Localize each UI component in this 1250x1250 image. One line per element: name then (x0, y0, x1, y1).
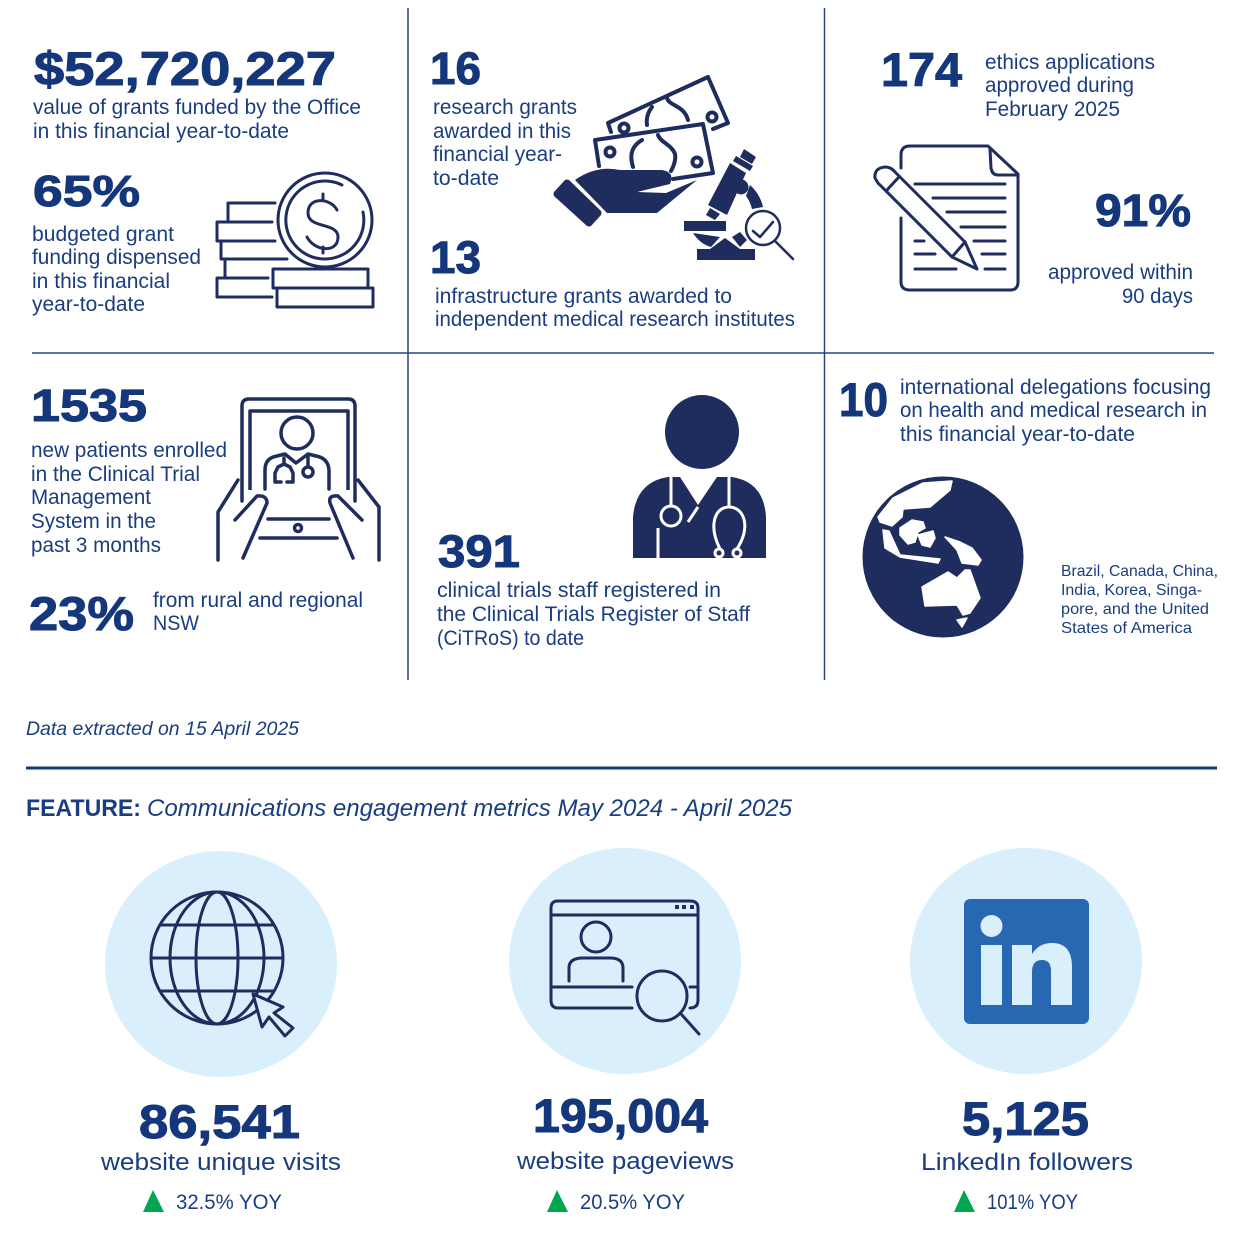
icon: coins (217, 173, 373, 307)
icon: microscope with magnifier (684, 149, 793, 260)
metric: 86,541 (100, 1095, 341, 1176)
icon: document and pencil (875, 146, 1018, 290)
stat: patients enrolled: Management (31, 486, 151, 509)
stat: clinical trials staff (437, 526, 750, 650)
change: 20.5% YOY: 20.5% YOY (580, 1191, 685, 1214)
stat: research grants: to-date (433, 167, 499, 190)
change: 101% YOY (954, 1190, 1078, 1214)
panel: clinical trial patients (29, 380, 379, 640)
stat: international delegations (839, 373, 1211, 446)
stat: rural and regional: 23% (29, 587, 134, 640)
stat: patients enrolled: past 3 months (31, 534, 161, 557)
stat: approved within 90 days: 90 days (1122, 285, 1193, 308)
icon: browser with magnifier (509, 848, 741, 1074)
feature heading: FEATURE: (26, 795, 141, 822)
stat: budget dispensed (32, 167, 201, 316)
stat: ethics applications: ethics applications (985, 51, 1155, 74)
stat: research grants (430, 43, 577, 190)
panel: international delegations (839, 373, 1218, 638)
stat: ethics applications (881, 43, 1155, 121)
panel: website pageviews (509, 848, 741, 1214)
feature heading: Communications engagement metrics May 2024 - April 2025 (147, 795, 793, 822)
stat: international delegations: international delegations focusing (900, 376, 1211, 399)
stat: clinical trials staff: clinical trials staff registered in (437, 579, 721, 602)
stat: clinical trials staff: the Clinical Trials Register of Staff (437, 603, 750, 626)
stat: budget dispensed: funding dispensed (32, 246, 201, 269)
metric: 195,004: 195,004 (533, 1089, 708, 1142)
panel: research grants (430, 43, 795, 331)
icon: globe showing Australia (862, 476, 1024, 638)
stat: rural and regional (29, 587, 363, 640)
stat: grant value (33, 42, 361, 143)
metric: 5,125: 5,125 (962, 1092, 1089, 1145)
stat: grant value: $52,720,227 (34, 42, 336, 95)
list of countries: States of America (1061, 620, 1192, 637)
stat: patients enrolled: in the Clinical Trial (31, 463, 200, 486)
list of countries: India, Korea, Singa- (1061, 582, 1202, 599)
icon: hands holding tablet with doctor (218, 399, 379, 560)
stat: ethics applications: 174 (881, 43, 962, 96)
panel: clinical trials staff (437, 395, 766, 650)
stat: patients enrolled: 1535 (31, 380, 147, 431)
stat: approved within 90 days: approved within (1048, 261, 1193, 284)
icon: doctor with stethoscope (633, 395, 766, 558)
panel: grant funding (32, 42, 373, 316)
stat: infrastructure grants: independent medical research institutes (435, 308, 795, 331)
stat: patients enrolled (31, 380, 227, 557)
metric: 195,004 (516, 1089, 734, 1175)
panel: ethics applications (875, 43, 1193, 308)
stat: budget dispensed: in this financial (32, 270, 170, 293)
metric: 5,125: LinkedIn followers (921, 1149, 1133, 1176)
icon: globe with cursor (105, 851, 337, 1077)
stat: patients enrolled: System in the (31, 510, 156, 533)
stat: rural and regional: NSW (153, 612, 199, 635)
stat: grant value: in this financial year-to-date (33, 120, 289, 143)
change: 32.5% YOY: 32.5% YOY (176, 1191, 282, 1214)
panel: website unique visits (100, 851, 341, 1214)
icon: hand holding money (554, 77, 728, 226)
stat: infrastructure grants (430, 232, 795, 331)
stat: clinical trials staff: 391 (438, 526, 520, 577)
stat: grant value: value of grants funded by the Office (33, 96, 361, 119)
list of countries (1061, 563, 1218, 637)
stat: international delegations: this financial year-to-date (900, 423, 1135, 446)
stat: clinical trials staff: (CiTRoS) to date (437, 627, 584, 650)
stat: international delegations: on health and medical research in (900, 399, 1207, 422)
metric: 5,125 (921, 1092, 1133, 1176)
change: 101% YOY: 101% YOY (987, 1191, 1078, 1214)
stat: international delegations: 10 (839, 373, 888, 426)
stat: budget dispensed: 65% (33, 167, 140, 216)
metric: 195,004: website pageviews (516, 1148, 734, 1175)
stat: rural and regional: from rural and regional (153, 589, 363, 612)
stat: ethics applications: February 2025 (985, 98, 1120, 121)
metric: 86,541: website unique visits (100, 1149, 341, 1176)
stat: research grants: awarded in this (433, 120, 571, 143)
stat: infrastructure grants: infrastructure grants awarded to (435, 285, 732, 308)
stat: budget dispensed: budgeted grant (32, 223, 174, 246)
stat: ethics applications: approved during (985, 74, 1134, 97)
stat: approved within 90 days (1048, 185, 1193, 308)
stat: budget dispensed: year-to-date (32, 293, 145, 316)
panel: LinkedIn followers (910, 848, 1142, 1214)
stat: patients enrolled: new patients enrolled (31, 439, 227, 462)
stat: research grants: financial year- (433, 143, 562, 166)
stat: approved within 90 days: 91% (1095, 185, 1191, 236)
stat: research grants: 16 (430, 43, 481, 94)
list of countries: pore, and the United (1061, 601, 1209, 618)
stat: infrastructure grants: 13 (430, 232, 481, 283)
metric: 86,541: 86,541 (139, 1095, 300, 1148)
list of countries: Brazil, Canada, China, (1061, 563, 1218, 580)
data extraction note: Data extracted on 15 April 2025 (26, 719, 299, 740)
icon: LinkedIn logo (910, 848, 1142, 1074)
stat: research grants: research grants (433, 96, 577, 119)
